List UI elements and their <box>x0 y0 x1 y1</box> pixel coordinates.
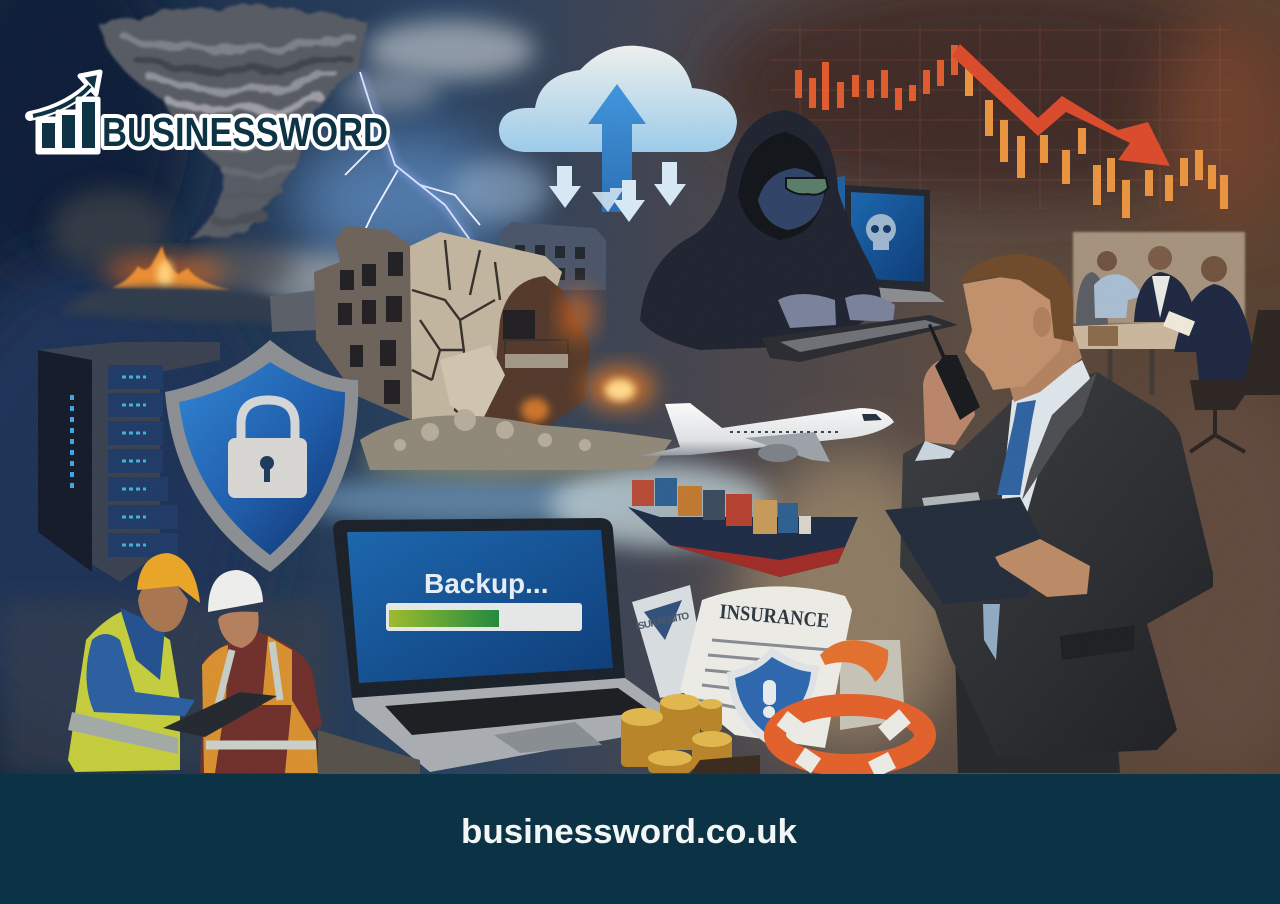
keyboard <box>762 315 958 362</box>
laptop with backup screen <box>333 518 690 772</box>
hacker <box>640 110 958 362</box>
shield with padlock <box>165 340 358 572</box>
rubble <box>360 409 672 470</box>
meeting group <box>1073 232 1280 452</box>
rear building <box>500 222 606 290</box>
laptop with backup screen: Backup... <box>424 568 548 599</box>
worker right <box>200 570 322 773</box>
foreground rubble <box>318 730 760 774</box>
fire on horizon <box>60 246 290 322</box>
wordmark: BUSINESSWORD <box>102 109 388 155</box>
icon: padlock <box>228 400 307 498</box>
footer url: businessword.co.uk <box>461 813 797 851</box>
face <box>758 168 824 230</box>
falling red arrow <box>952 44 1170 166</box>
gold coins <box>621 694 732 773</box>
arrow: up <box>588 84 646 212</box>
shirt <box>997 360 1090 545</box>
front wall <box>410 232 562 425</box>
trousers <box>955 640 1120 773</box>
storm clouds <box>50 20 550 308</box>
radio <box>928 324 980 420</box>
arrows: down <box>549 162 686 222</box>
insurance documents: INSURANCE <box>719 599 830 633</box>
stock chart <box>770 25 1230 218</box>
icon: small shield <box>727 647 819 744</box>
progress bar <box>386 603 582 631</box>
airplane <box>640 403 894 462</box>
side wall <box>314 226 412 420</box>
lightning <box>345 72 480 245</box>
logo <box>30 72 388 155</box>
hands <box>778 294 836 328</box>
person at right <box>1163 256 1256 390</box>
footer band <box>0 774 1280 904</box>
exposed interior <box>478 276 590 432</box>
hacker monitor <box>820 176 945 302</box>
left wing <box>270 290 318 332</box>
back person <box>1076 272 1108 325</box>
businessman <box>885 254 1213 773</box>
tornado <box>100 4 367 240</box>
glasses <box>786 178 828 195</box>
jacket <box>900 372 1213 757</box>
hand on clipboard <box>995 539 1090 597</box>
tie <box>997 400 1036 495</box>
neck <box>1010 335 1082 402</box>
clipboard <box>163 692 277 737</box>
collapsed building <box>270 226 590 432</box>
lapel <box>1022 372 1097 500</box>
cuff <box>915 441 955 461</box>
worker left <box>68 553 200 772</box>
cargo ship <box>628 478 858 577</box>
icon: skull <box>866 214 896 250</box>
face <box>963 270 1070 390</box>
cloud with arrows <box>499 46 737 222</box>
icon: rising chart <box>30 72 100 152</box>
chair <box>1190 310 1280 410</box>
table <box>1073 322 1182 349</box>
clipboard <box>885 492 1047 604</box>
hair <box>960 254 1073 342</box>
insurance documents: ISURANSITO <box>635 611 691 633</box>
person in blue shirt <box>1094 251 1142 318</box>
workers <box>68 553 322 773</box>
person in navy jacket <box>1134 246 1196 322</box>
hand <box>923 358 975 445</box>
insurance documents <box>632 585 905 748</box>
ear <box>1033 307 1051 337</box>
server rack <box>38 342 220 582</box>
jacket pocket <box>1060 625 1135 660</box>
building fire <box>521 289 654 422</box>
lifebuoy <box>775 640 925 770</box>
